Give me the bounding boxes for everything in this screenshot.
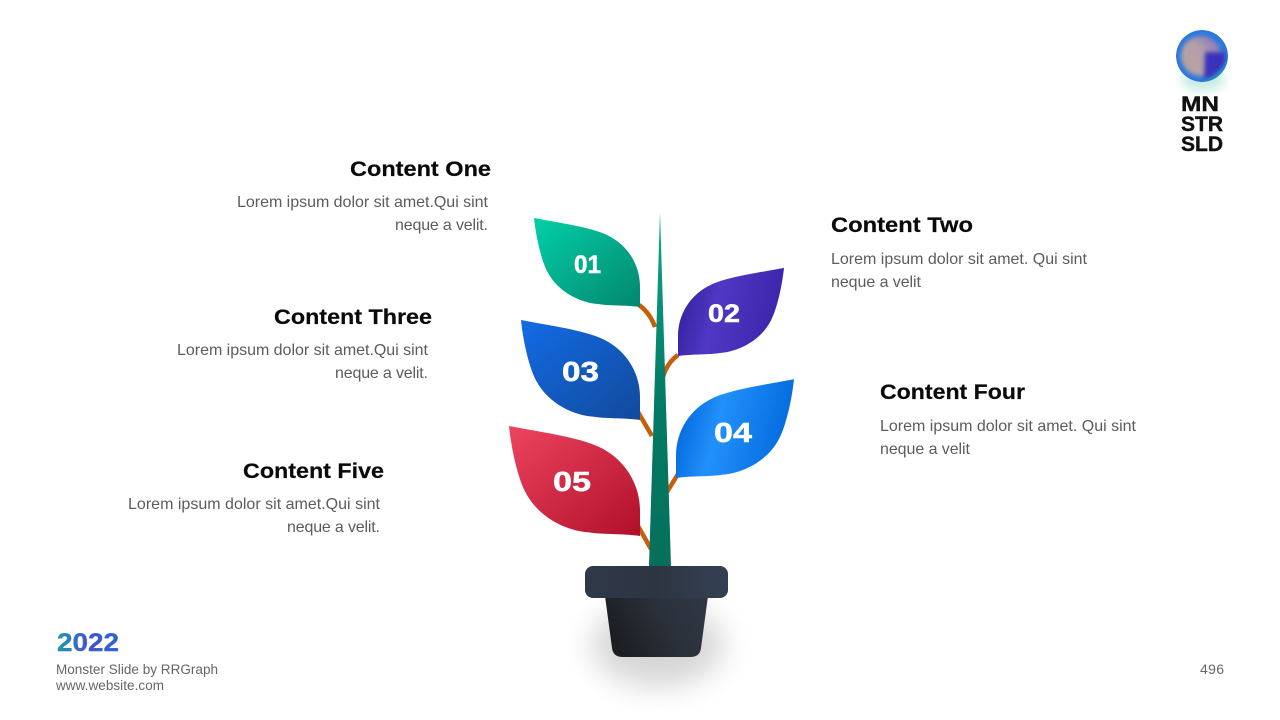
pot shadow: [592, 603, 724, 687]
leaf 02: [678, 268, 784, 356]
footer: year: 2022: [57, 629, 119, 657]
logo wordmark: SLD: [1181, 133, 1223, 156]
text block: content three: Lorem ipsum dolor sit amet.Qui sint: [177, 342, 429, 359]
text block: content two: neque a velit: [831, 274, 922, 291]
text block: content five: [128, 460, 384, 536]
text block: content one: Content One: [350, 158, 491, 181]
text block: content four: [880, 381, 1137, 458]
leaf 04: 04: [714, 417, 753, 448]
leaf 02: 02: [708, 300, 740, 328]
leaf 05: [509, 426, 640, 536]
leaf 03: [521, 320, 640, 420]
text block: content five: neque a velit.: [287, 519, 380, 536]
text block: content four: neque a velit: [880, 441, 971, 458]
text block: content one: Lorem ipsum dolor sit amet.Qui sint: [237, 194, 489, 211]
logo: [1176, 30, 1228, 156]
text block: content three: Content Three: [274, 306, 432, 329]
footer: credit: www.website.com: [55, 678, 164, 693]
pot: [585, 566, 728, 657]
text block: content three: [177, 306, 432, 382]
logo orb: [1176, 30, 1228, 91]
text block: content five: Content Five: [243, 460, 384, 483]
stem: [649, 212, 671, 566]
footer: credit: [55, 662, 218, 693]
logo wordmark: [1181, 93, 1223, 156]
logo wordmark: STR: [1181, 113, 1223, 136]
text block: content four: Lorem ipsum dolor sit amet. Qui sint: [880, 418, 1137, 435]
text block: content two: Content Two: [831, 214, 973, 237]
page number: 496: [1200, 661, 1224, 677]
text block: content four: Content Four: [880, 381, 1025, 404]
text block: content two: [831, 214, 1088, 291]
text block: content one: neque a velit.: [395, 217, 488, 234]
plant: [509, 212, 794, 687]
text block: content one: [237, 158, 491, 234]
leaf 01: 01: [574, 251, 601, 279]
leaf 05: 05: [553, 466, 591, 497]
footer: credit: Monster Slide by RRGraph: [56, 662, 218, 677]
leaf 01: [534, 218, 640, 307]
branches: [638, 305, 678, 549]
text block: content two: Lorem ipsum dolor sit amet. Qui sint: [831, 251, 1088, 268]
logo wordmark: MN: [1181, 93, 1219, 116]
leaf 03: 03: [562, 356, 599, 387]
leaf 04: [676, 379, 794, 478]
text block: content three: neque a velit.: [335, 365, 428, 382]
text block: content five: Lorem ipsum dolor sit amet.Qui sint: [128, 496, 381, 513]
